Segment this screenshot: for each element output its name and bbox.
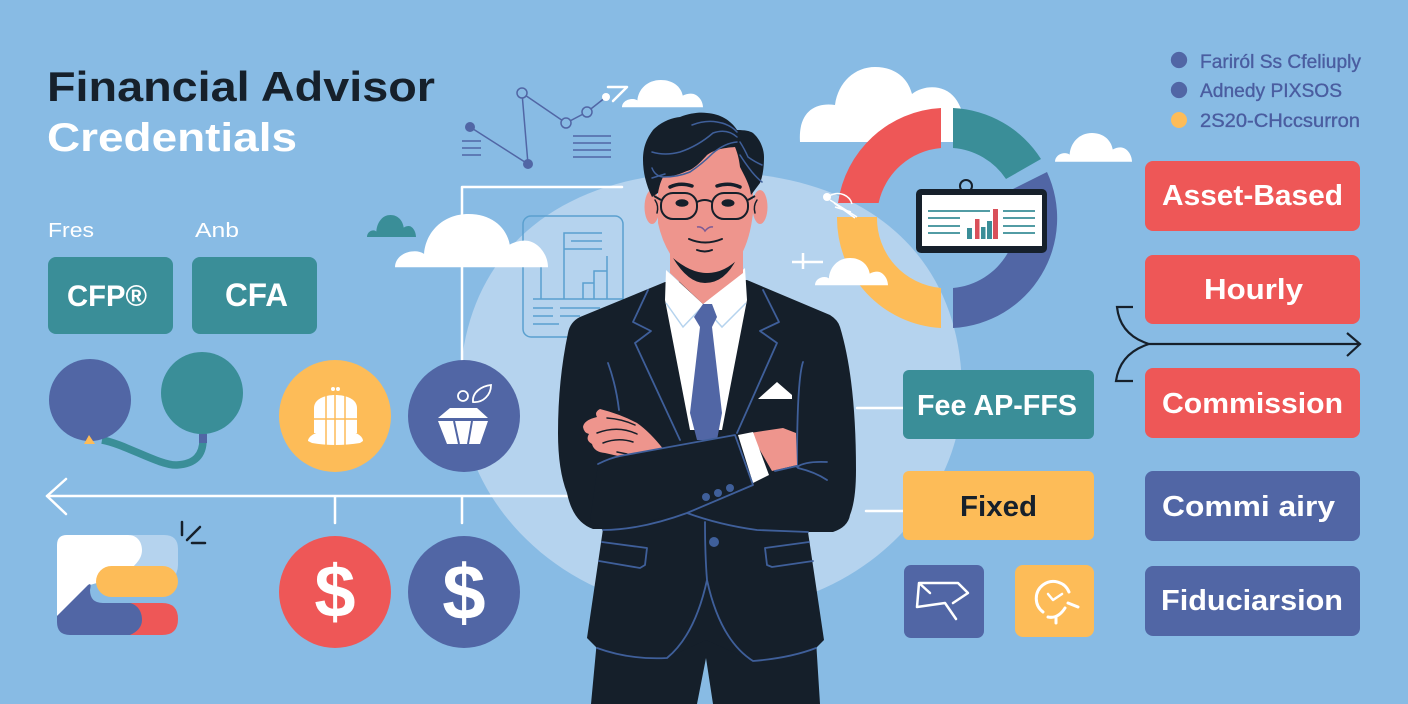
cloud: lower small xyxy=(815,258,888,285)
merging arrow xyxy=(1116,307,1360,381)
left arrow head xyxy=(47,479,66,514)
icon: blue pot with leaf xyxy=(408,360,520,472)
yellow box: Fixed: Fixed xyxy=(960,491,1037,523)
badge: CFP xyxy=(48,257,173,334)
credential labels: Anb xyxy=(195,220,239,242)
jacket xyxy=(558,280,856,661)
face xyxy=(658,140,753,273)
blue box: Fiduciarsion: Fiduciarsion xyxy=(1161,585,1343,617)
tie xyxy=(690,304,722,440)
shirt xyxy=(665,268,747,430)
red box: Commission xyxy=(1145,368,1360,438)
line chart decoration xyxy=(462,87,627,169)
eyebrows xyxy=(670,184,740,187)
hair xyxy=(643,113,764,197)
blue box: Commi airy xyxy=(1145,471,1360,541)
cloud: teal small xyxy=(367,215,416,237)
jacket buttons xyxy=(702,484,734,547)
cloud: top right xyxy=(1055,133,1132,162)
background light circle xyxy=(460,172,962,612)
neck shadow xyxy=(673,258,737,283)
yellow box: Fixed xyxy=(903,471,1094,540)
icon: blue dollar: $ xyxy=(442,548,486,636)
pocket square xyxy=(758,382,792,399)
credential labels: Fres xyxy=(48,220,94,242)
title xyxy=(47,63,435,160)
icon: stacked shapes xyxy=(57,522,205,635)
lapels xyxy=(608,290,803,465)
red box: Asset-Based: Asset-Based xyxy=(1162,180,1343,212)
legend: 2S20-CHccsurron xyxy=(1200,111,1360,132)
trousers xyxy=(591,640,820,704)
badge: CFP: CFP® xyxy=(67,280,147,313)
sleeve xyxy=(590,435,753,530)
teal box: Fee AP-FFS xyxy=(903,370,1094,439)
finger lines xyxy=(597,418,637,454)
linked circles diagram xyxy=(49,352,243,465)
nose xyxy=(697,227,713,231)
left hand xyxy=(583,409,664,458)
badge: CFA xyxy=(192,257,317,334)
clipboard tablet xyxy=(916,180,1047,253)
blue box: Commi airy: Commi airy xyxy=(1162,491,1335,523)
cloud behind donut xyxy=(800,67,968,142)
right hand xyxy=(750,428,797,471)
cuff xyxy=(738,432,769,483)
blue box: Fiduciarsion xyxy=(1145,566,1360,636)
glasses xyxy=(654,193,755,219)
teal box: Fee AP-FFS: Fee AP-FFS xyxy=(917,390,1077,422)
icon: blue dollar xyxy=(408,536,520,648)
badge: CFA: CFA xyxy=(225,277,288,313)
icon tile: clock xyxy=(1015,565,1094,637)
eyes xyxy=(676,199,734,207)
red box: Asset-Based xyxy=(1145,161,1360,231)
red box: Hourly: Hourly xyxy=(1204,274,1303,306)
title: Financial Advisor xyxy=(47,63,435,110)
donut chart xyxy=(837,108,1057,328)
document outline with bar chart xyxy=(523,216,623,337)
connector frame lines xyxy=(47,187,903,523)
title: Credentials xyxy=(47,116,297,160)
icon: red dollar xyxy=(279,536,391,648)
red box: Hourly xyxy=(1145,255,1360,324)
legend: Adnedy PIXSOS xyxy=(1200,81,1342,102)
advisor figure xyxy=(558,113,856,704)
credential labels xyxy=(48,220,239,242)
icon: yellow building xyxy=(279,360,391,472)
ear inner lines xyxy=(655,200,757,213)
red box: Commission: Commission xyxy=(1162,388,1343,420)
legend xyxy=(1171,52,1361,132)
jacket seam lines xyxy=(597,435,827,661)
neck xyxy=(670,250,743,304)
legend: Fariról Ss Cfeliuply xyxy=(1200,52,1361,73)
plus sign xyxy=(792,253,823,269)
icon tile: tag xyxy=(904,565,984,638)
mouth xyxy=(689,239,722,252)
cloud: left center xyxy=(395,214,548,267)
small white figure xyxy=(823,193,857,218)
cloud: top center xyxy=(622,80,703,107)
hair highlights xyxy=(652,121,762,182)
icon: red dollar: $ xyxy=(314,550,356,633)
ears xyxy=(644,190,768,224)
collar lines xyxy=(666,303,746,327)
